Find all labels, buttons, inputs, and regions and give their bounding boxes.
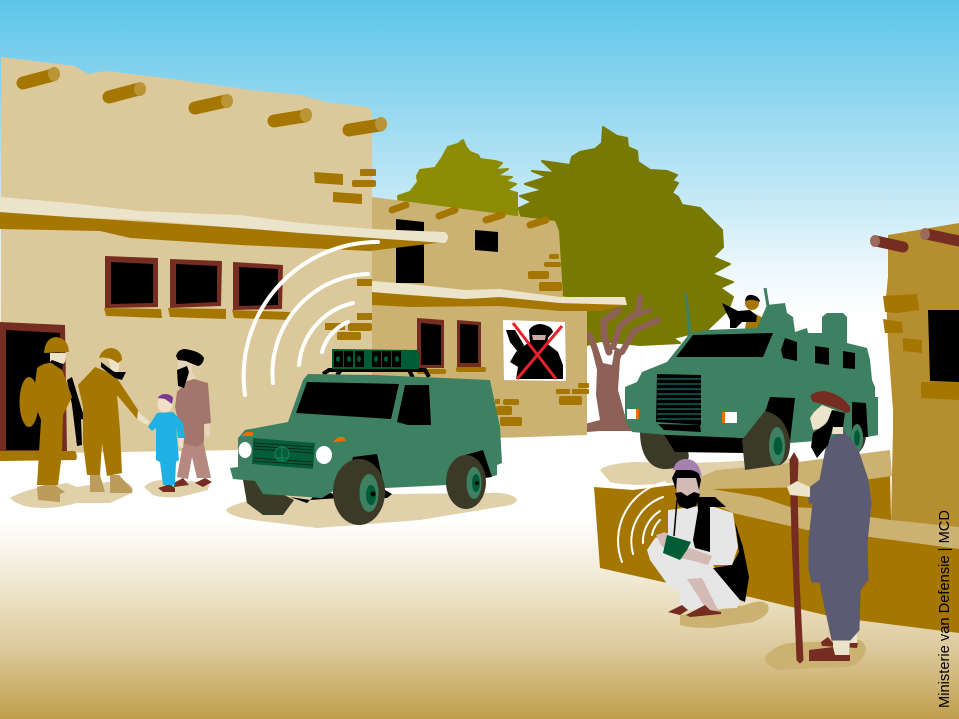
soldier: left	[20, 337, 85, 502]
front sandal	[809, 647, 850, 661]
log caps	[870, 235, 880, 247]
soldier: right	[78, 348, 150, 493]
roof logs	[392, 205, 546, 225]
grille	[252, 438, 315, 469]
helmet	[99, 348, 122, 363]
hair	[672, 470, 701, 490]
background: sky	[0, 0, 959, 340]
side windows	[781, 338, 855, 369]
wall patches	[883, 294, 959, 400]
turban	[176, 349, 204, 366]
face and neck	[178, 358, 196, 381]
mask	[101, 362, 126, 380]
hand	[204, 424, 210, 437]
rear foot	[850, 633, 857, 643]
credit text: Ministerie van Defensie | MCD	[936, 510, 953, 708]
clothes	[148, 412, 185, 485]
windows	[105, 256, 283, 310]
cap	[673, 459, 702, 477]
armoured vehicle	[625, 288, 878, 470]
top bank	[690, 450, 959, 549]
shadow: child and man	[144, 480, 210, 497]
front-left wheel	[243, 480, 294, 515]
wheel arches	[345, 450, 492, 490]
child	[148, 394, 185, 492]
rear wheel	[446, 455, 486, 509]
front foot	[833, 640, 850, 655]
building: right	[870, 223, 959, 540]
poster: wanted	[503, 320, 566, 381]
neck	[832, 425, 843, 434]
hull	[625, 303, 878, 443]
front-left wheel	[640, 432, 689, 469]
beard and hair	[811, 410, 845, 458]
headlights	[238, 442, 252, 458]
body	[33, 363, 72, 485]
radio strap	[674, 500, 677, 536]
standing man with staff	[787, 391, 871, 663]
sandal	[158, 484, 175, 492]
arms	[656, 532, 712, 565]
roof rack	[323, 370, 429, 378]
head	[158, 396, 172, 412]
roof logs	[876, 234, 959, 247]
vest	[693, 497, 749, 602]
roof ledge cream	[372, 281, 627, 305]
backpack	[20, 377, 38, 427]
rear wheel	[845, 408, 866, 453]
roof ledge brown	[0, 212, 445, 251]
roof ledge cream	[0, 197, 448, 243]
shins	[687, 578, 718, 610]
window sills	[104, 308, 290, 320]
shadow: crouching man	[680, 602, 769, 628]
beard	[177, 366, 189, 388]
door	[396, 219, 424, 283]
face	[50, 353, 66, 366]
front wheel	[742, 411, 790, 470]
man: tall, brown clothes	[174, 349, 212, 487]
sandals	[668, 605, 721, 617]
side window	[397, 385, 431, 425]
boots	[37, 483, 65, 502]
shadow: soldiers	[10, 482, 133, 508]
roof logs	[23, 75, 380, 130]
log caps	[48, 67, 387, 131]
building: front left	[0, 57, 448, 461]
shadow: standing man	[765, 640, 866, 670]
rifle	[67, 377, 85, 446]
body	[230, 374, 502, 498]
face	[675, 474, 699, 503]
tree: light olive	[398, 140, 518, 222]
staff	[790, 453, 803, 663]
white clothes	[647, 505, 740, 610]
radio	[663, 535, 691, 560]
hand	[787, 481, 810, 497]
rear hub	[851, 424, 863, 452]
face	[108, 358, 120, 372]
door	[0, 322, 67, 452]
hand	[178, 438, 184, 448]
antenna	[686, 288, 768, 335]
body	[78, 367, 138, 476]
helmet	[44, 337, 69, 353]
speaker box	[332, 349, 419, 369]
embankment wall	[594, 470, 959, 633]
underbody	[290, 490, 392, 503]
robe	[809, 430, 871, 640]
sandals	[174, 478, 212, 487]
bricks	[417, 254, 589, 426]
trousers	[177, 440, 211, 479]
SUV	[230, 349, 502, 525]
tunic	[175, 378, 211, 447]
face	[810, 405, 835, 430]
hand	[137, 412, 150, 425]
building: rear	[372, 197, 627, 442]
beard	[675, 492, 700, 509]
ground shadow: armoured vehicle	[600, 458, 790, 485]
sound waves: radio	[618, 482, 665, 562]
lights	[627, 409, 737, 423]
turban	[810, 391, 850, 413]
window	[928, 310, 959, 382]
bricks	[314, 169, 376, 340]
front wheel	[333, 459, 385, 525]
wheel arches	[760, 397, 868, 442]
tree trunk	[585, 297, 658, 432]
underbody	[663, 433, 745, 453]
crouching man with radio	[647, 459, 749, 617]
background: ground	[0, 340, 959, 719]
windscreen	[296, 382, 399, 419]
indicators	[241, 432, 346, 442]
grille	[656, 374, 701, 432]
upper window	[475, 230, 498, 252]
door threshold	[0, 451, 77, 461]
windows	[417, 318, 481, 368]
cap	[158, 394, 173, 404]
windscreen	[676, 333, 773, 357]
strap	[50, 360, 63, 370]
SUV shadow	[226, 493, 517, 528]
boots	[90, 475, 132, 493]
roof ledge brown	[372, 292, 627, 311]
gunner	[722, 295, 767, 329]
rear sandal	[821, 637, 858, 648]
tree: dark olive	[519, 127, 733, 345]
road embankment	[594, 450, 959, 633]
sound waves: from vehicle	[244, 242, 378, 395]
